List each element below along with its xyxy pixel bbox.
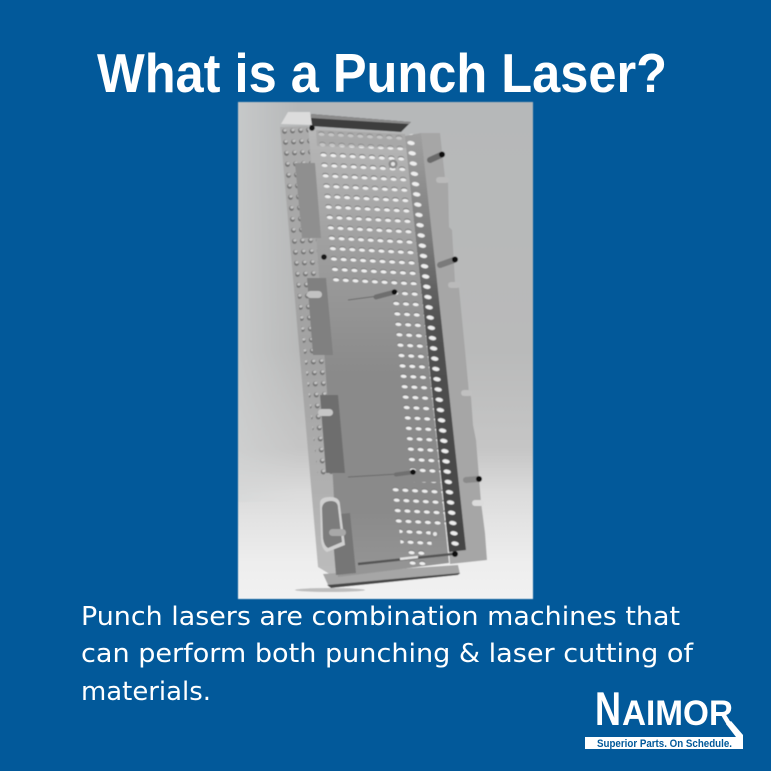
body text: Punch lasers are combination machines that (81, 602, 680, 632)
folded tabs (295, 163, 356, 575)
title: What is a Punch Laser? (97, 42, 667, 104)
body text: materials. (81, 677, 211, 707)
infographic canvas (82, 52, 743, 749)
right flange with notches (421, 133, 487, 564)
photo backdrop (238, 102, 533, 599)
main plate perforations (315, 128, 449, 568)
body text: can perform both punching & laser cutting of (81, 639, 694, 669)
top channel lip (281, 112, 411, 132)
dark perforated strip (405, 133, 466, 552)
logo tagline box (585, 721, 743, 750)
flange slots (307, 291, 346, 552)
strip holes (406, 134, 460, 546)
left flange holes (282, 128, 333, 475)
logo: Naimor (585, 682, 743, 750)
rivets and screws (309, 125, 440, 538)
logo wordmark: AIMOR (622, 694, 733, 733)
main plate (309, 128, 449, 577)
logo wordmark: N (595, 682, 621, 735)
bottom lip (323, 565, 460, 588)
left flange (280, 126, 355, 578)
photo: perforated sheet metal part (238, 102, 533, 599)
standoff pins (348, 152, 482, 564)
logo tagline box: Superior Parts. On Schedule. (597, 738, 732, 750)
